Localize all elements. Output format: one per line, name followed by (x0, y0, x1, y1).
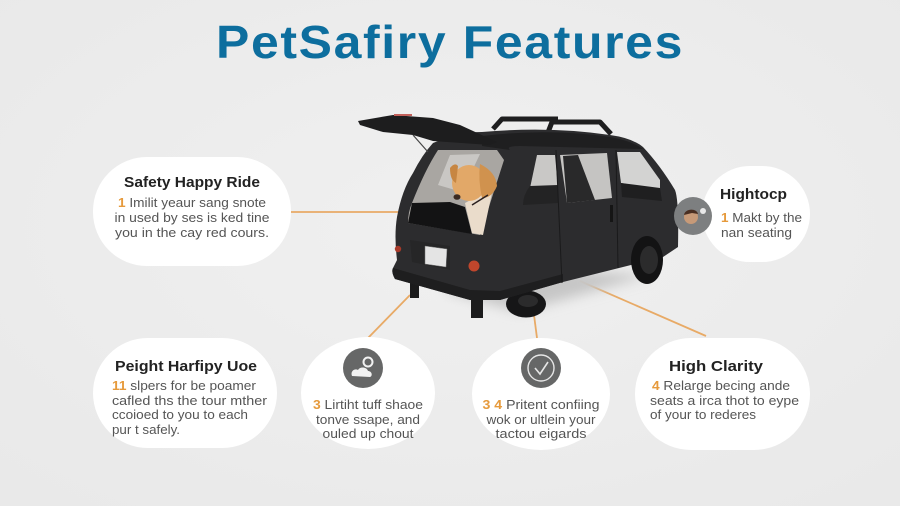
van ground shadow (440, 270, 650, 312)
panel: peight harfipy uoe: pur t safely. (112, 423, 180, 437)
dog (450, 164, 497, 235)
hitch and mud flap (410, 283, 483, 318)
panel: pritent confiing: wok or ultlein your (485, 413, 596, 427)
panel: hightocp: nan seating (721, 226, 792, 240)
roof rack (493, 119, 611, 135)
panel: peight harfipy uoe: cafled ths the tour mther (112, 394, 267, 408)
icon: check badge (521, 348, 561, 388)
panel: high clarity (635, 338, 810, 450)
panel: high clarity: of your to rederes (650, 408, 756, 422)
connector lines (290, 212, 706, 338)
panel: safety happy ride: in used by ses is ked tine (114, 211, 270, 225)
rear bumper (392, 268, 563, 300)
panel: lirtiht tuff shape: tonve ssape, and (316, 413, 420, 427)
roof (482, 132, 643, 150)
cargo area (408, 202, 472, 234)
panel: safety happy ride: you in the cay red cours. (115, 226, 269, 240)
panel: lirtiht tuff shape: ouled up chout (322, 427, 414, 441)
door seams and handle (556, 150, 618, 283)
plate recess (410, 240, 450, 270)
van illustration (358, 114, 678, 318)
icon: cloud and pet (343, 348, 383, 388)
panel: safety happy ride: 1 Imilit yeaur sang snote (118, 196, 266, 210)
panel: hightocp (702, 166, 810, 262)
front wheel (631, 236, 663, 284)
van body (392, 130, 678, 300)
panel: peight harfipy uoe (93, 338, 277, 448)
panel: hightocp: Hightocp (720, 186, 787, 203)
panel: pritent confiing: 3 4 Pritent confiing (482, 398, 600, 412)
panel: peight harfipy uoe: Peight Harfipy Uoe (115, 358, 257, 375)
panel: peight harfipy uoe: ccoioed to you to each (112, 408, 248, 422)
panel: safety happy ride: Safety Happy Ride (124, 174, 260, 191)
panel: pritent confiing: tactou eigards (496, 427, 586, 441)
panel: peight harfipy uoe: 11 slpers for be poamer (112, 379, 256, 393)
panel: pritent confiing (472, 338, 610, 450)
panel: safety happy ride (93, 157, 291, 266)
rear window pale pane (438, 154, 480, 192)
title: PetSafiry Features (216, 16, 684, 68)
side windows (530, 155, 558, 188)
panel: high clarity: 4 Relarge becing ande (652, 379, 790, 393)
panel: high clarity: High Clarity (669, 358, 764, 375)
panel: high clarity: seats a irca thot to eype (650, 394, 799, 408)
tailgate (358, 115, 497, 145)
rear wheel (506, 290, 546, 318)
tail lights (468, 260, 480, 272)
panel: lirtiht tuff shape: 3 Lirtiht tuff shaoe (313, 398, 423, 412)
panel: lirtiht tuff shape (301, 337, 435, 449)
rear window opening (408, 150, 504, 235)
panel: hightocp: 1 Makt by the (721, 211, 802, 225)
icon: pet avatar (674, 197, 712, 235)
license plate (425, 246, 447, 267)
